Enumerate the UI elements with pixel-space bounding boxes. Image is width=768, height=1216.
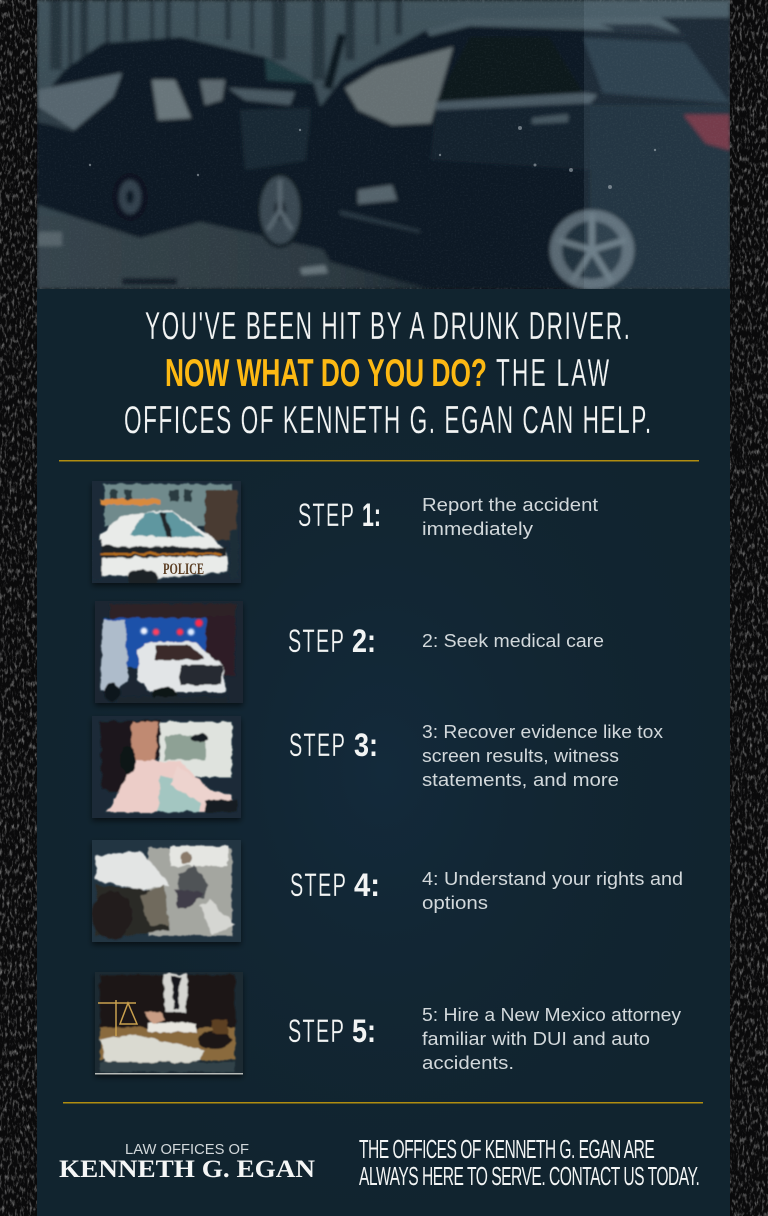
step 1 photo: police car: POLICE	[163, 561, 204, 578]
heading: THE LAW	[496, 351, 609, 395]
panel: navy content background	[37, 289, 730, 1216]
step 1 text: Report the accident	[422, 495, 598, 515]
step 3 label: STEP	[289, 727, 345, 763]
step 4 text	[422, 869, 683, 913]
step 5 text: accidents.	[422, 1053, 514, 1073]
step 4 label: 4:	[354, 867, 380, 903]
step 3 text	[422, 722, 663, 790]
step 1	[298, 495, 598, 539]
step 4 label: STEP	[290, 867, 346, 903]
step 4 text: options	[422, 893, 488, 913]
call to action text: THE OFFICES OF KENNETH G. EGAN ARE	[359, 1135, 655, 1164]
heading: YOU'VE BEEN HIT BY A DRUNK DRIVER.	[145, 304, 630, 348]
call to action text	[359, 1135, 700, 1191]
step 1 label: STEP	[298, 497, 354, 533]
step 1 text	[422, 495, 598, 539]
heading: OFFICES OF KENNETH G. EGAN CAN HELP.	[124, 398, 651, 442]
step 3 text: screen results, witness	[422, 746, 619, 766]
step 3	[289, 722, 663, 790]
step 5 label	[288, 1013, 376, 1049]
step 1 text: immediately	[422, 519, 533, 539]
step 2 text: 2: Seek medical care	[422, 631, 604, 651]
step 5 text: familiar with DUI and auto	[422, 1029, 650, 1049]
step 2 label: 2:	[352, 623, 376, 659]
heading	[124, 304, 651, 442]
step 4 text: 4: Understand your rights and	[422, 869, 683, 889]
heading: NOW WHAT DO YOU DO?	[165, 352, 487, 395]
step 1 label: 1:	[362, 497, 381, 533]
step 4 photo: wrecked car and man on curb	[92, 840, 241, 942]
step 3 photo: woman on phone at crash	[92, 716, 241, 818]
step 2 photo: ambulance	[95, 601, 243, 703]
step 3 text: 3: Recover evidence like tox	[422, 722, 663, 742]
step 3 text: statements, and more	[422, 770, 619, 790]
step 5 text: 5: Hire a New Mexico attorney	[422, 1005, 681, 1025]
step 5 text	[422, 1005, 681, 1073]
step 1 photo: police car	[92, 481, 241, 589]
step 5 photo: lawyer desk with scales and gavel	[95, 972, 243, 1074]
step 2 label	[288, 623, 376, 659]
step 2	[288, 623, 604, 659]
step 4 label	[290, 867, 380, 903]
step 5 label: 5:	[352, 1013, 376, 1049]
logo: law offices of Kenneth G. Egan: KENNETH G. EGAN	[59, 1156, 315, 1183]
step 4	[290, 867, 683, 913]
hero photo: crashed cars in snow	[37, 0, 730, 290]
step 5 label: STEP	[288, 1013, 344, 1049]
step 5	[288, 1005, 681, 1073]
logo: law offices of Kenneth G. Egan: LAW OFFICES OF	[125, 1141, 249, 1158]
step 3 label: 3:	[354, 727, 378, 763]
call to action text: ALWAYS HERE TO SERVE. CONTACT US TODAY.	[359, 1162, 700, 1191]
logo: law offices of Kenneth G. Egan	[59, 1141, 315, 1183]
step 3 label	[289, 727, 378, 763]
step 2 label: STEP	[288, 623, 344, 659]
step 1 label	[298, 497, 381, 533]
